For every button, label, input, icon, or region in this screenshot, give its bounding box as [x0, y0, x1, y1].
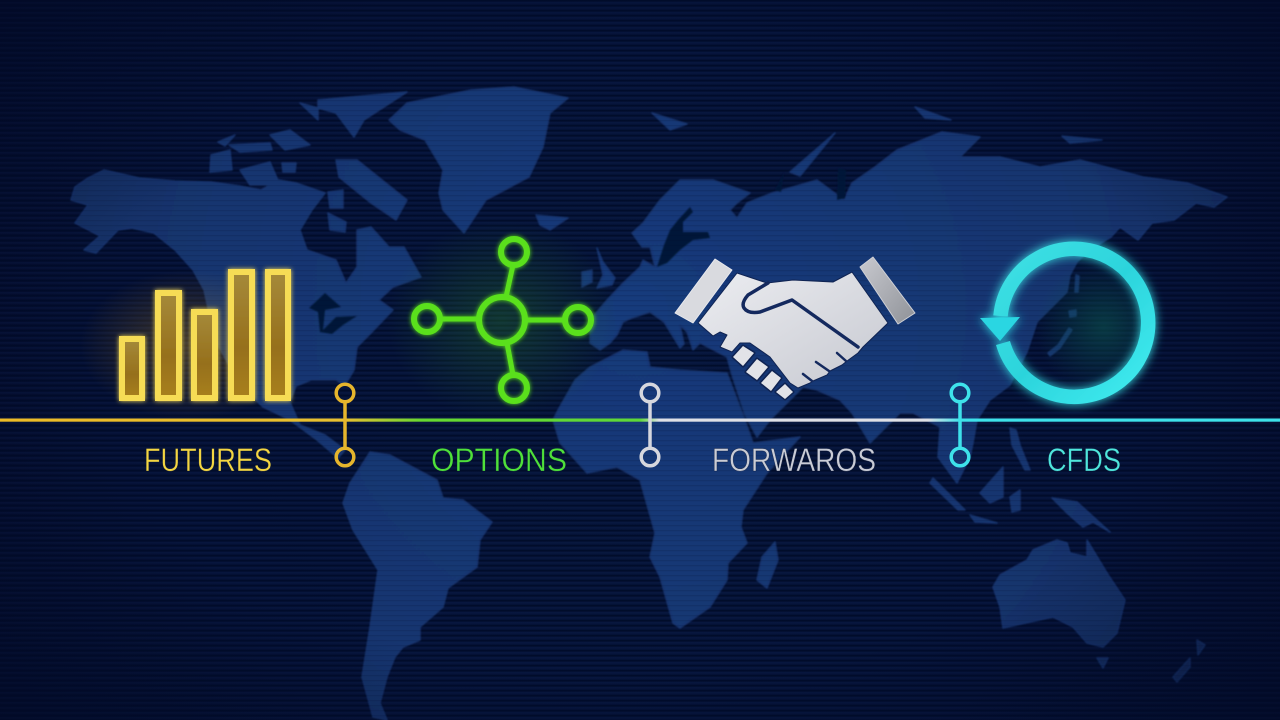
panel: forwards: [675, 257, 969, 478]
icon: bar chart: [122, 272, 288, 398]
glow: cycle interior: [1006, 252, 1142, 388]
map: british isles: [582, 248, 615, 288]
map: australia: [993, 540, 1125, 647]
map: inland seas: [309, 168, 846, 334]
panel: futures: [122, 272, 354, 478]
thumb and finger slits: [743, 283, 858, 381]
connector: forwards: [951, 384, 969, 466]
label: futures: FUTURES: [144, 442, 272, 478]
glow: futures: [80, 270, 300, 420]
connector: futures: [336, 384, 354, 466]
map: tasmania and new zealand: [1097, 640, 1205, 682]
map: new guinea: [1052, 498, 1110, 532]
map: greenland: [389, 87, 568, 233]
map: eurasia: [590, 132, 1227, 483]
map: southeast asia islands: [930, 428, 1030, 523]
map: japan: [1048, 275, 1079, 356]
icon: network hub: [414, 239, 591, 401]
left cuff: [675, 259, 732, 323]
map: northern islands: [652, 107, 1102, 176]
label: cfds: CFDS: [1047, 442, 1121, 478]
map: north america: [71, 170, 421, 458]
glow: options: [387, 220, 617, 420]
hands: [698, 272, 888, 388]
map: south america: [343, 452, 492, 720]
knuckles: [733, 346, 793, 399]
timeline: [0, 418, 1280, 422]
map: africa: [553, 350, 800, 628]
world map: [71, 87, 1227, 720]
right cuff: [860, 257, 915, 324]
panel: cfds: [980, 249, 1148, 478]
panel: options: [414, 239, 659, 478]
connector: options: [641, 384, 659, 466]
icon: cycle arrow: [980, 249, 1148, 397]
icon: handshake: [675, 257, 915, 399]
map: madagascar: [757, 542, 778, 588]
label: options: OPTIONS: [431, 442, 567, 478]
label: forwards: FORWAROS: [712, 442, 876, 478]
map: arctic islands: [210, 92, 568, 232]
